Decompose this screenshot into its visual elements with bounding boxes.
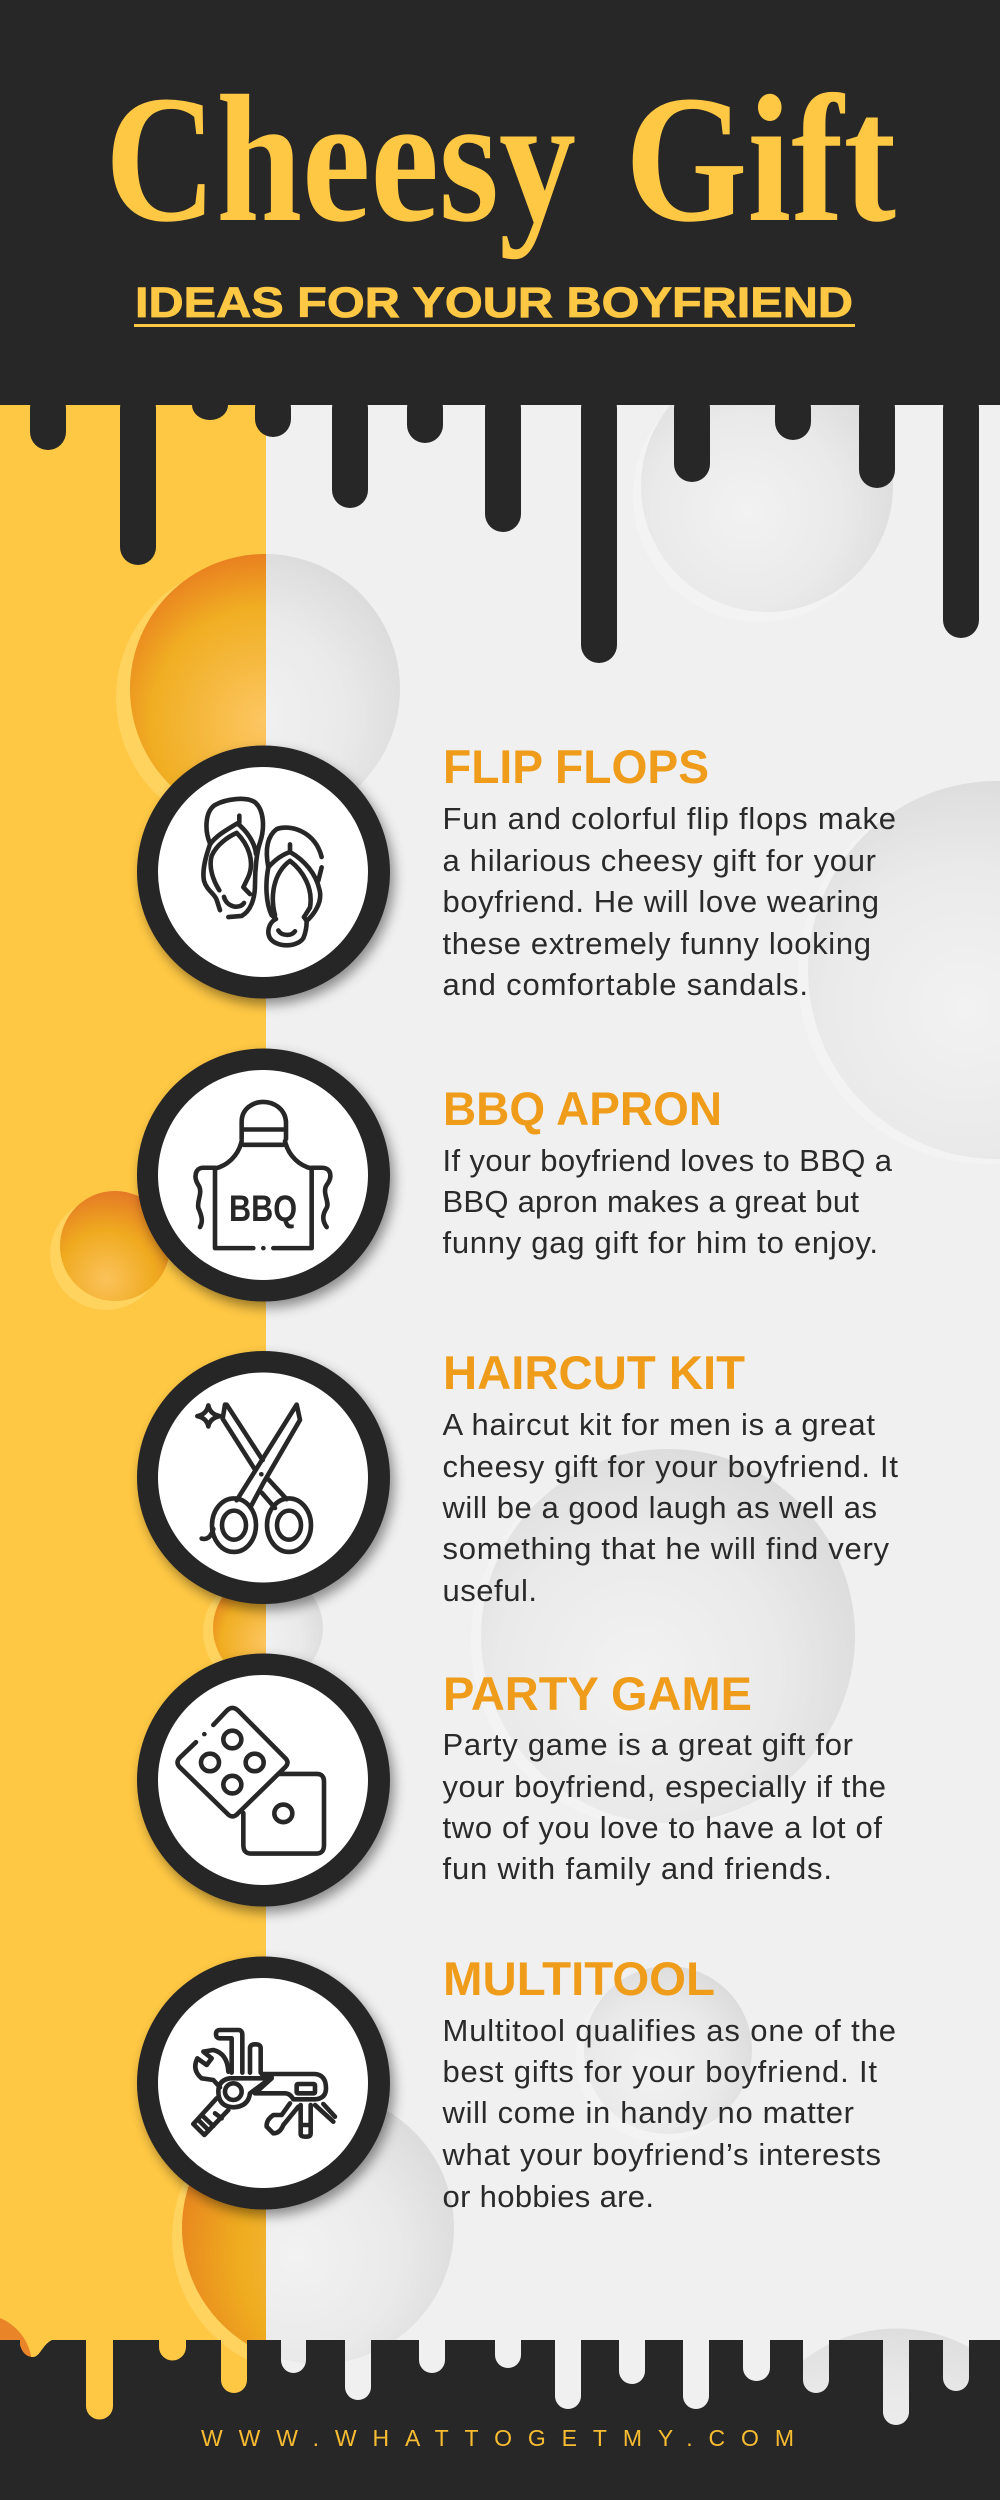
cheese hole: small left (50, 1191, 170, 1310)
icon: multitool (193, 2030, 335, 2137)
title: Cheesy (105, 59, 576, 260)
text: bbq apron: If your boyfriend loves to BBQ a (442, 1143, 893, 1178)
icon badge: flip flops (137, 746, 390, 998)
text: haircut kit: will be a good laugh as well as (442, 1490, 877, 1525)
icon: flip flops (203, 799, 322, 945)
text: multitool: what your boyfriend’s interests (442, 2137, 881, 2172)
text: haircut kit: A haircut kit for men is a great (442, 1407, 875, 1442)
text: haircut kit: useful. (442, 1573, 537, 1608)
footer url: WWW.WHATTOGETMY.COM (201, 2425, 794, 2451)
text: flip flops: Fun and colorful flip flops make (442, 801, 896, 836)
text: party game: Party game is a great gift for (442, 1727, 853, 1762)
text: haircut kit (442, 1407, 898, 1608)
text: party game: fun with family and friends. (442, 1851, 832, 1886)
cheese hole: large middle right (471, 1449, 855, 1829)
icon: dice (177, 1708, 324, 1854)
text: multitool: best gifts for your boyfriend. It (442, 2054, 877, 2089)
subtitle: IDEAS FOR YOUR BOYFRIEND (135, 279, 853, 327)
heading: party game: PARTY GAME (443, 1667, 752, 1720)
section: multitool (442, 1952, 896, 2214)
text: party game: two of you love to have a lot of (442, 1810, 882, 1845)
heading: flip flops: FLIP FLOPS (443, 740, 709, 793)
cheese hole: large right edge (798, 781, 1000, 1164)
text: multitool: Multitool qualifies as one of the (442, 2013, 896, 2048)
footer panel with drips (0, 2340, 1000, 2500)
section: bbq apron (442, 1082, 893, 1260)
title: Gift (625, 59, 896, 260)
heading: bbq apron: BBQ APRON (443, 1082, 722, 1135)
text: bbq apron (442, 1143, 893, 1260)
heading: multitool: MULTITOOL (443, 1952, 715, 2005)
text: flip flops: a hilarious cheesy gift for your (442, 843, 876, 878)
text: party game (442, 1727, 886, 1886)
text: multitool: or hobbies are. (442, 2179, 654, 2214)
section: haircut kit (442, 1346, 898, 1608)
text: multitool: will come in handy no matter (442, 2095, 854, 2130)
icon badge: party game (137, 1654, 390, 1906)
cheese hole: behind multitool text (576, 1966, 752, 2142)
text: bbq apron: BBQ apron makes a great but (442, 1184, 859, 1219)
apron lettering: BBQ (229, 1188, 297, 1229)
icon: scissors (197, 1405, 311, 1552)
icon badge: bbq apron (137, 1048, 390, 1302)
section: flip flops (442, 740, 896, 1002)
text: flip flops: and comfortable sandals. (442, 967, 808, 1002)
header panel with drips (0, 0, 1000, 663)
cheese hole: large upper centre (116, 554, 400, 798)
text: party game: your boyfriend, especially if the (442, 1769, 886, 1804)
text: multitool (442, 2013, 896, 2214)
cheese hole: bottom right (745, 2328, 1000, 2479)
text: bbq apron: funny gag gift for him to enjoy. (442, 1225, 878, 1260)
cheese hole: small middle (203, 1594, 323, 1664)
section: party game (442, 1667, 886, 1886)
text: flip flops: boyfriend. He will love wearing (442, 884, 879, 919)
cheese hole: upper top right (633, 360, 893, 622)
heading: haircut kit: HAIRCUT KIT (443, 1346, 745, 1399)
icon badge: multitool (137, 1956, 390, 2210)
text: flip flops (442, 801, 896, 1002)
text: haircut kit: something that he will find very (442, 1531, 890, 1566)
icon badge: haircut kit (137, 1351, 390, 1604)
cheese hole: large lower centre (172, 2111, 454, 2361)
icon: apron (196, 1102, 330, 1248)
cheese hole: bottom left corner (0, 2318, 32, 2366)
text: flip flops: these extremely funny looking (442, 926, 871, 961)
text: haircut kit: cheesy gift for your boyfriend. It (442, 1449, 898, 1484)
